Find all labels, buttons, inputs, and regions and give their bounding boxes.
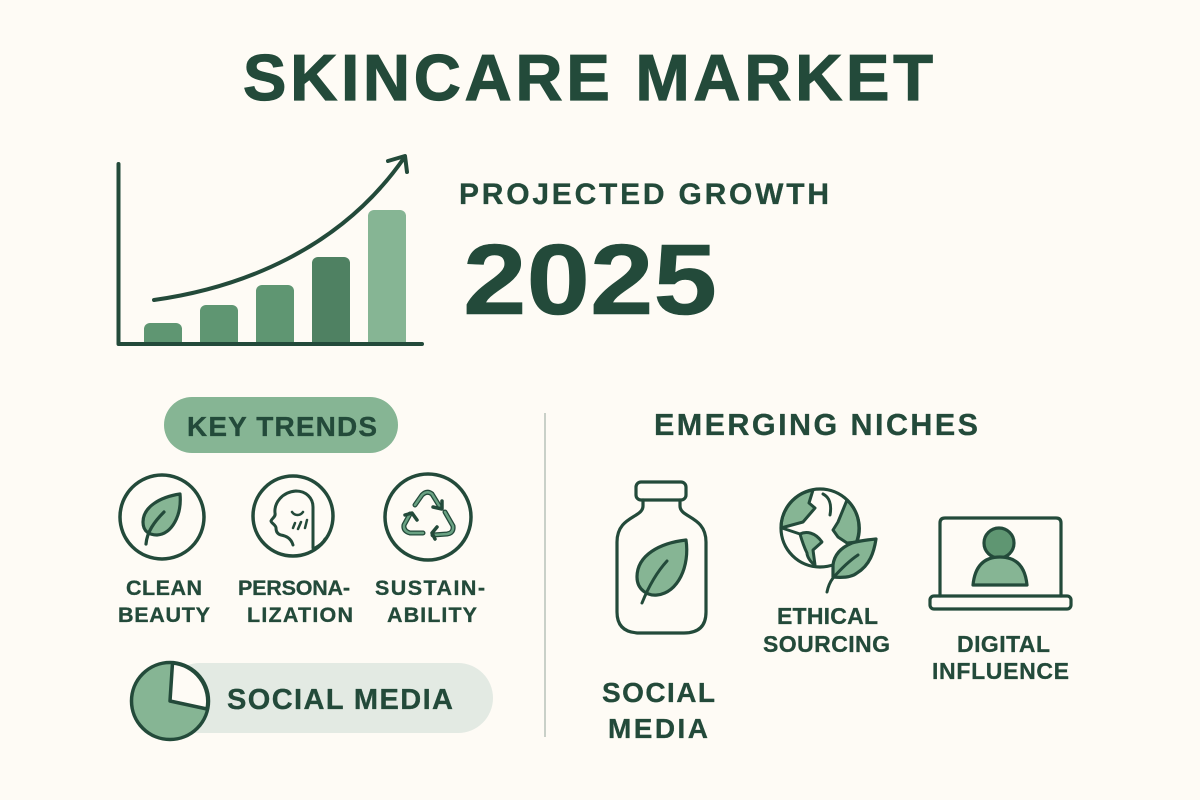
label: clean beauty: BEAUTY: [118, 603, 210, 627]
label: personalization: [238, 576, 353, 627]
year 2025: 2025: [463, 224, 717, 336]
bar 1: [144, 323, 182, 344]
social media pill: SOCIAL MEDIA: [227, 684, 453, 716]
social media pill: [132, 662, 493, 740]
icon: personalization face: [253, 476, 333, 556]
icon: sustainability recycle: [385, 474, 471, 560]
bar 4: [312, 257, 350, 344]
bar 2: [200, 305, 238, 344]
emerging niches heading: EMERGING NICHES: [654, 408, 978, 442]
bar 5: [368, 210, 406, 344]
label: digital influence: INFLUENCE: [932, 658, 1069, 684]
label: social media niche: SOCIAL: [602, 677, 715, 708]
label: sustainability: ABILITY: [387, 603, 477, 627]
label: ethical sourcing: ETHICAL: [777, 603, 878, 629]
label: sustainability: [375, 576, 485, 627]
title: SKINCARE MARKET: [243, 41, 933, 114]
key trends pill: KEY TRENDS: [187, 411, 377, 442]
icon: laptop with person: [930, 518, 1071, 609]
icon: clean beauty leaf: [120, 475, 204, 559]
bar 3: [256, 285, 294, 344]
icon: globe with leaf: [781, 489, 876, 592]
label: clean beauty: [118, 576, 210, 627]
label: personalization: LIZATION: [247, 603, 353, 627]
label: personalization: PERSONA-: [238, 576, 350, 600]
bar chart: projected growth: [118, 156, 422, 344]
chart axes: [118, 164, 422, 344]
label: digital influence: [932, 631, 1069, 684]
icon: bottle with leaf: [617, 482, 706, 633]
key trends pill: [164, 397, 398, 453]
growth arrow: [154, 156, 407, 300]
label: sustainability: SUSTAIN-: [375, 576, 485, 600]
label: clean beauty: CLEAN: [126, 576, 202, 600]
label: social media niche: [602, 677, 715, 744]
icon: pie chart: [132, 662, 208, 740]
label: ethical sourcing: SOURCING: [763, 631, 890, 657]
label: social media niche: MEDIA: [608, 713, 708, 744]
label: digital influence: DIGITAL: [957, 631, 1050, 657]
projected growth heading: PROJECTED GROWTH: [459, 178, 829, 211]
label: ethical sourcing: [763, 603, 890, 657]
